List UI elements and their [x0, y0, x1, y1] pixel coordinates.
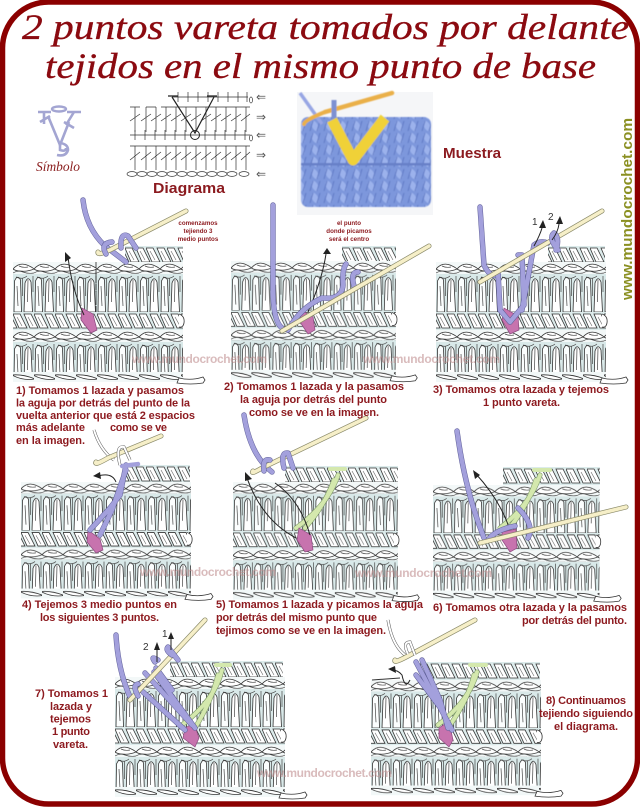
watermarks: www.mundocrochet.com	[131, 352, 267, 366]
watermarks: www.mundocrochet.com	[139, 565, 276, 579]
sample label: Muestra	[443, 145, 502, 162]
step 4 illustration	[21, 430, 213, 600]
step 1 illustration	[13, 200, 205, 384]
caption step 1	[16, 385, 195, 447]
step 5 illustration	[233, 415, 419, 602]
watermarks: www.mundocrochet.com	[354, 566, 492, 580]
stitch diagram: ⇒	[256, 110, 266, 124]
watermarks: www.mundocrochet.com	[256, 766, 392, 780]
caption step 7: 1 punto	[52, 726, 90, 738]
caption step 7	[35, 688, 108, 751]
step 7 illustration: 1	[162, 629, 168, 640]
caption step 5	[216, 599, 424, 637]
watermarks: www.mundocrochet.com	[362, 352, 500, 366]
caption step 8: el diagrama.	[554, 721, 618, 733]
diagram label: Diagrama	[153, 180, 226, 197]
caption step 6	[433, 602, 627, 627]
step 8 illustration	[371, 620, 563, 797]
stitch diagram: ⇐	[256, 167, 266, 181]
stitch diagram: ⇐	[256, 90, 266, 104]
note: centre stitch: donde picamos	[326, 228, 372, 235]
caption step 2: la aguja por detrás del punto	[240, 394, 387, 406]
caption step 1: 1) Tomamos 1 lazada y pasamos	[16, 385, 184, 397]
watermarks	[131, 352, 500, 780]
caption step 4: los siguientes 3 puntos.	[40, 612, 159, 624]
symbol legend	[36, 106, 81, 175]
caption step 5: por detrás del mismo punto que	[216, 612, 377, 624]
caption step 7: 7) Tomamos 1	[35, 688, 108, 700]
caption step 4: 4) Tejemos 3 medio puntos en	[22, 599, 177, 611]
caption step 1: como se ve	[110, 422, 167, 434]
caption step 2: como se ve en la imagen.	[249, 407, 379, 419]
caption step 8: 8) Continuamos	[546, 695, 626, 707]
step 7 illustration: 2	[143, 642, 149, 653]
title	[22, 7, 629, 86]
caption step 6: 6) Tomamos otra lazada y la pasamos	[433, 602, 627, 614]
step 3 illustration: 1	[532, 217, 538, 228]
caption step 7: tejemos	[50, 714, 91, 726]
caption step 1: la aguja por detrás del punto de la	[16, 398, 191, 410]
stitch diagram: ⇒	[256, 148, 266, 162]
caption step 7: vareta.	[53, 739, 88, 751]
note: centre stitch: será el centro	[329, 236, 369, 243]
caption step 5: tejimos como se ve en la imagen.	[216, 625, 386, 637]
step 3 illustration	[436, 207, 628, 384]
caption step 2: 2) Tomamos 1 lazada y la pasamos	[224, 381, 404, 393]
stitch diagram: ⇐	[256, 128, 266, 142]
caption step 1: más adelante	[16, 422, 85, 434]
caption step 8	[539, 695, 633, 733]
title: tejidos en el mismo punto de base	[45, 46, 596, 86]
caption step 2	[224, 381, 404, 419]
photo sample	[297, 92, 433, 215]
note: start with half stitches: comenzamos	[178, 220, 218, 227]
caption step 1: en la imagen.	[16, 435, 85, 447]
caption step 6: por detrás del punto.	[522, 615, 627, 627]
caption step 4	[22, 599, 177, 624]
caption step 3	[433, 384, 609, 409]
note: centre stitch: el punto	[337, 220, 361, 227]
note: centre stitch	[326, 220, 372, 243]
caption step 8: tejiendo siguiendo	[539, 708, 633, 720]
caption step 1: vuelta anterior que está 2 espacios	[16, 410, 195, 422]
symbol label: Símbolo	[36, 160, 80, 175]
caption step 3: 1 punto vareta.	[483, 397, 560, 409]
step 2 illustration	[231, 205, 429, 382]
step 3 illustration: 2	[548, 212, 554, 223]
note: start with half stitches	[178, 220, 219, 243]
caption step 3: 3) Tomamos otra lazada y tejemos	[433, 384, 609, 396]
step 7 illustration	[115, 620, 307, 799]
step 6 illustration	[433, 431, 626, 602]
note: start with half stitches: medio puntos	[178, 236, 219, 243]
title: 2 puntos vareta tomados por delante	[22, 7, 629, 47]
note: start with half stitches: tejiendo 3	[184, 228, 213, 235]
stitch diagram	[127, 90, 266, 197]
caption step 5: 5) Tomamos 1 lazada y picamos la aguja	[216, 599, 424, 611]
vertical website text: www.mundocrochet.com	[619, 118, 636, 301]
caption step 7: lazada y	[50, 701, 93, 713]
